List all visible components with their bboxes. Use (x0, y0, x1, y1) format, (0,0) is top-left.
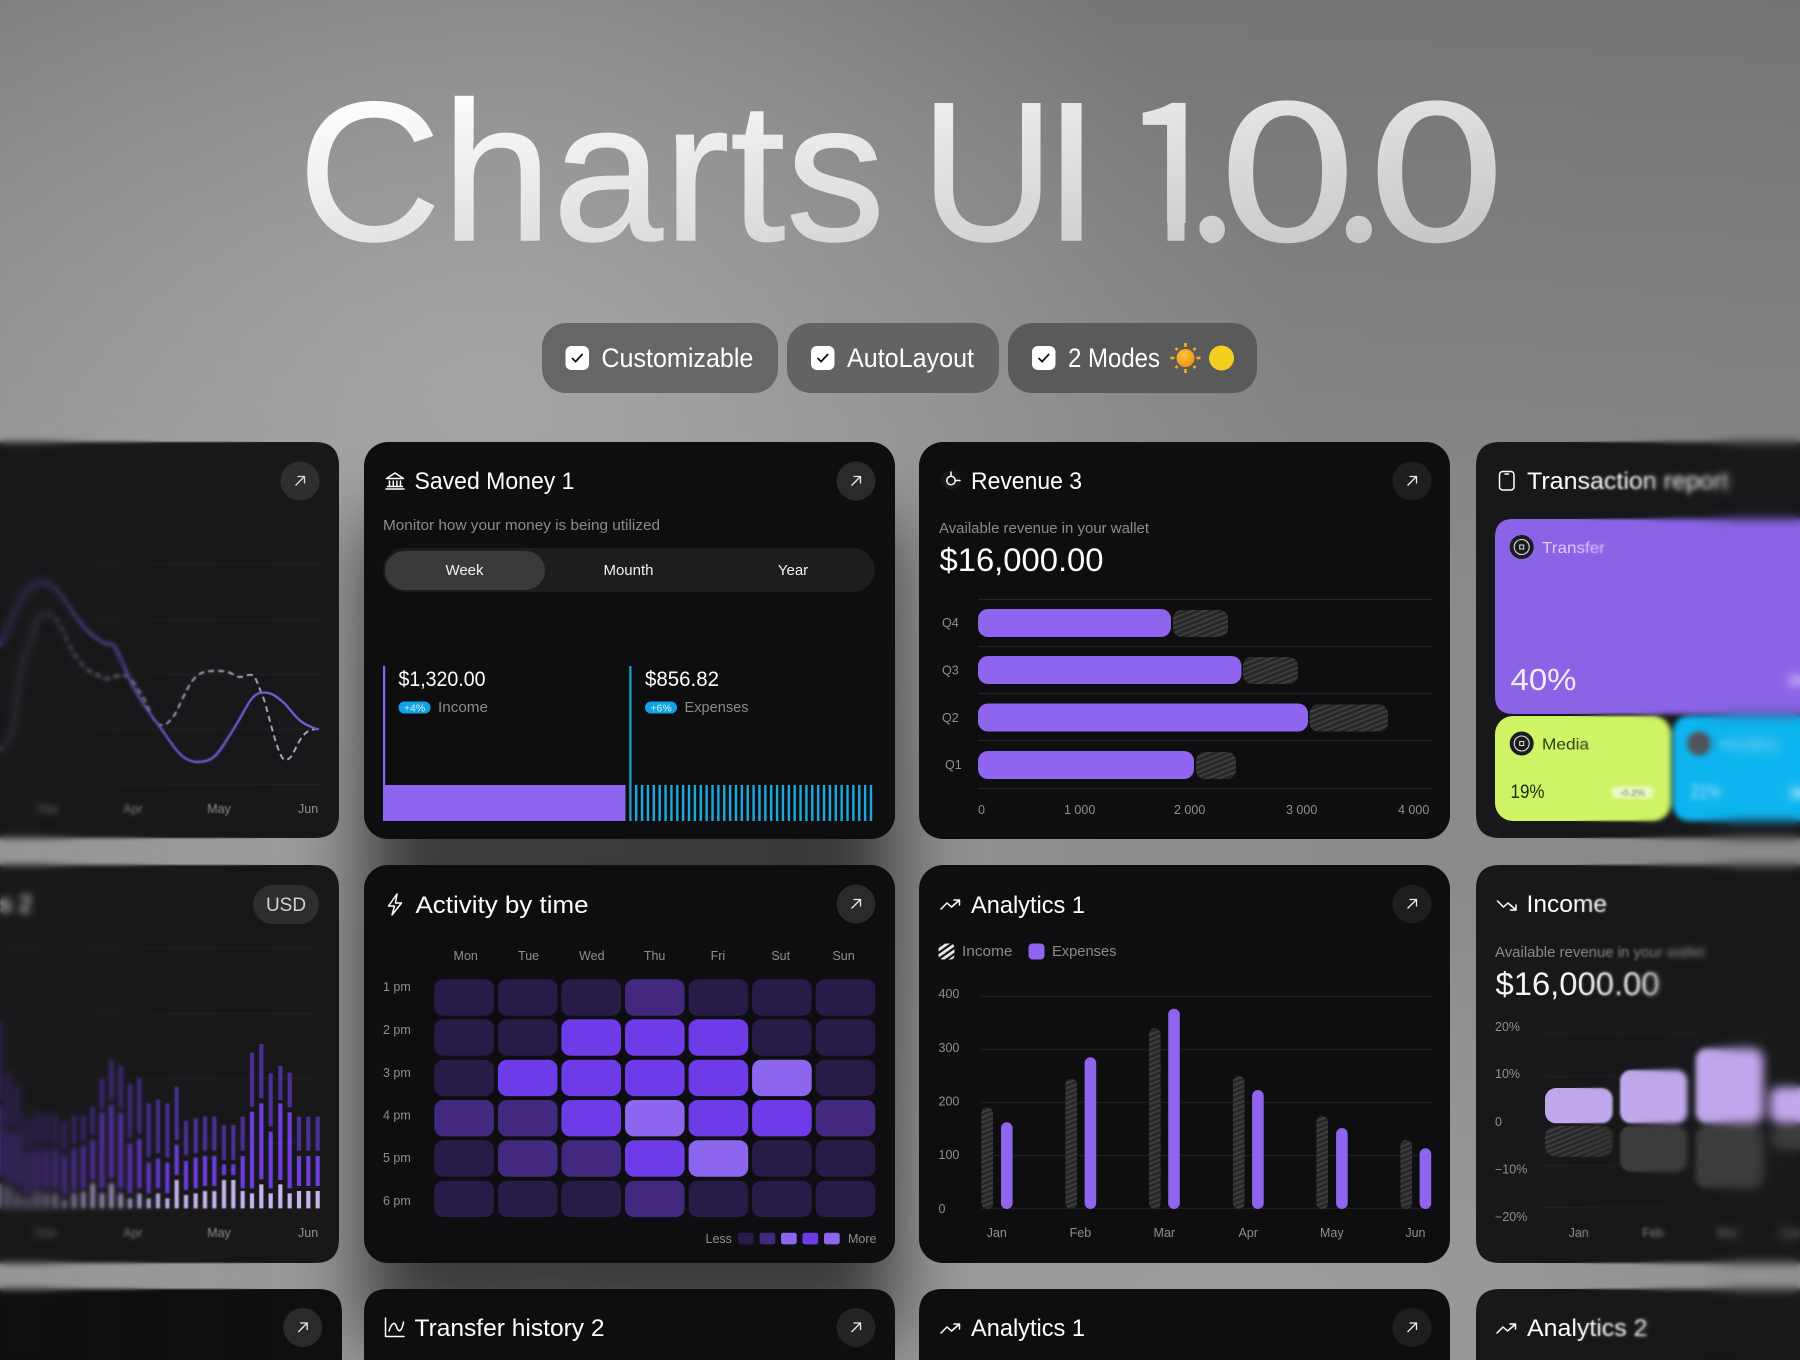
panel: Revenue 3 (919, 442, 1450, 839)
hour labels: 6 pm (383, 1194, 411, 1208)
panel: Analytics 2 (1476, 1289, 1800, 1360)
tile: Healthy (1673, 716, 1800, 821)
tile: Media: Media (1542, 736, 1589, 754)
badge: 2 Modes: 2 Modes (1068, 343, 1160, 373)
horizontal bar chart: 3 000 (1286, 803, 1317, 817)
tile: Transfer: Transfer (1542, 540, 1606, 557)
income column (383, 666, 626, 821)
stacked bar chart (0, 1020, 318, 1208)
button: open arrow (836, 1308, 876, 1347)
tile: Healthy: Healthy (1720, 736, 1778, 754)
badge: AutoLayout: AutoLayout (847, 343, 974, 373)
expenses column: $856.82 (645, 668, 719, 691)
panel: bottom-left card (0, 1289, 342, 1360)
heading: Transfer history 2 (414, 1315, 604, 1342)
icon: trend up (941, 900, 960, 909)
icon: trend up (1497, 1324, 1516, 1333)
value: $16,000.00 (940, 542, 1104, 578)
expenses column: Expenses (684, 699, 748, 716)
month labels: Apr (123, 1226, 143, 1240)
horizontal bar chart: Q1 (945, 758, 962, 772)
line: dashed series (0, 613, 319, 760)
horizontal bar chart: 1 000 (1064, 803, 1095, 817)
heading: Revenue 3 (971, 468, 1082, 495)
button: currency (253, 885, 319, 924)
diverging bar chart: Mar (1717, 1226, 1739, 1240)
title (307, 96, 1496, 244)
grouped bar chart: 300 (938, 1041, 959, 1055)
subtitle: Available revenue in your wallet (939, 520, 1150, 537)
grouped bar chart: Apr (1238, 1226, 1258, 1240)
badge: Customizable: Customizable (601, 343, 753, 373)
value: $16,000.00 (1496, 966, 1660, 1002)
icon: moon (1209, 346, 1234, 370)
panel: Analytics 1 (919, 865, 1450, 1263)
heading: Transaction report (1527, 468, 1729, 495)
horizontal bar chart: 2 000 (1174, 803, 1205, 817)
button: open arrow (836, 462, 876, 500)
horizontal bar chart (942, 600, 1432, 817)
tile: Transfer (1495, 519, 1800, 714)
title: 1 (1121, 24, 1224, 294)
horizontal bar chart: 0 (978, 803, 985, 817)
icon: trend up (941, 1324, 960, 1333)
heatmap legend: Less (706, 1232, 732, 1246)
expenses column: +6% (650, 702, 672, 714)
grouped bar chart: 0 (938, 1202, 946, 1216)
horizontal bar chart: 4 000 (1398, 803, 1429, 817)
month labels: May (207, 1226, 232, 1240)
badge: Customizable (542, 323, 778, 393)
button: open arrow (1392, 1308, 1432, 1347)
icon: phone (1500, 472, 1514, 490)
diverging bar chart: 10% (1495, 1067, 1520, 1081)
day labels: Tue (518, 949, 539, 963)
grouped bar chart: 200 (938, 1094, 959, 1108)
hour labels: 2 pm (383, 1023, 411, 1037)
heatmap legend: More (848, 1232, 877, 1246)
tile: Media: -0.2% (1620, 788, 1645, 799)
heatmap (434, 979, 875, 1217)
icon: bolt (388, 894, 402, 915)
panel: Transfer history 2 (364, 1289, 895, 1360)
heading: Activity by time (416, 892, 588, 919)
grouped bar chart: Mar (1154, 1226, 1175, 1240)
title: . (1333, 24, 1385, 294)
title: 0 (1366, 24, 1507, 294)
tile: Media: 19% (1510, 782, 1545, 803)
grouped bar chart: Feb (1070, 1226, 1091, 1240)
button: currency: USD (266, 895, 306, 916)
month labels: Mar (35, 1226, 57, 1240)
day labels: Fri (711, 949, 725, 963)
title: U (921, 61, 1054, 282)
diverging bar chart: −10% (1495, 1162, 1527, 1176)
heading: Saved Money 1 (414, 468, 574, 495)
segmented control (383, 548, 875, 592)
tile: Transfer: 40% (1510, 662, 1576, 697)
grouped bar chart: Jun (1405, 1226, 1426, 1240)
diverging bar chart: Jan (1569, 1226, 1589, 1240)
title: 0 (1217, 24, 1358, 294)
diverging bar chart: 0 (1495, 1115, 1502, 1129)
button: open arrow (280, 462, 320, 500)
heading: Analytics 2 (1527, 1315, 1648, 1342)
heading: Analytics 1 (971, 1315, 1085, 1342)
icon: revenue (942, 470, 960, 490)
subtitle: Available revenue in your wallet (1495, 944, 1706, 961)
badge: AutoLayout (787, 323, 999, 393)
button: open arrow (1392, 462, 1432, 500)
month labels (35, 1226, 318, 1240)
title: Charts (298, 61, 885, 282)
panel: line chart (left, row 1) (0, 442, 339, 838)
hour labels: 4 pm (383, 1108, 411, 1122)
heatmap legend (706, 1232, 877, 1246)
horizontal bar chart: Q2 (942, 711, 959, 725)
day labels: Sut (771, 949, 791, 963)
panel: stacked bars (left, row 2) (0, 865, 339, 1263)
chart legend: Expenses (1052, 943, 1116, 960)
hour labels: 3 pm (383, 1066, 411, 1080)
chart legend (938, 943, 1116, 960)
button: open arrow (836, 884, 876, 924)
income column: +4% (404, 702, 425, 714)
button: open arrow (283, 1308, 322, 1347)
panel: Saved Money 1 (364, 442, 895, 839)
income column: $1,320.00 (398, 668, 486, 691)
hour labels: 5 pm (383, 1151, 411, 1165)
segmented control: Mounth (603, 562, 654, 579)
income column: Income (438, 699, 488, 716)
icon: bank (386, 473, 404, 489)
day labels: Sun (832, 949, 855, 963)
heading: Analytics 1 (971, 892, 1085, 919)
day labels: Wed (579, 949, 605, 963)
day labels: Thu (644, 949, 665, 963)
heading: Income (1526, 891, 1607, 918)
hour labels: 1 pm (383, 980, 411, 994)
grouped bar chart: 400 (938, 987, 959, 1001)
subtitle: Monitor how your money is being utilized (383, 517, 660, 534)
grouped bar chart: May (1320, 1226, 1344, 1240)
hour labels (383, 980, 411, 1208)
title: I (1044, 61, 1099, 282)
month labels: Jun (298, 802, 318, 816)
segmented control: Week (445, 562, 484, 579)
panel: Activity by time (364, 865, 895, 1263)
diverging bar chart (1495, 1020, 1800, 1240)
button: open arrow (1392, 884, 1432, 924)
day labels (454, 949, 855, 963)
segmented control: Year (778, 562, 808, 579)
grouped bar chart (938, 987, 1432, 1240)
tile: Healthy: 21% (1690, 782, 1721, 803)
chart legend: Income (962, 943, 1012, 960)
month labels: Jun (298, 1226, 318, 1240)
day labels: Mon (454, 949, 478, 963)
panel: Income (1476, 865, 1800, 1263)
line: purple series (0, 582, 319, 762)
month labels (37, 802, 318, 816)
grouped bar chart: Jan (987, 1226, 1007, 1240)
feature badges (542, 323, 1257, 393)
month labels: Apr (123, 802, 143, 816)
panel: Analytics 1 (row 3) (919, 1289, 1450, 1360)
icon: sun (1170, 343, 1200, 373)
icon: trend down (1498, 901, 1516, 910)
month labels: May (207, 802, 232, 816)
diverging bar chart: Apr (1780, 1226, 1800, 1240)
heading fragment: s 2 (0, 891, 32, 918)
month labels: Mar (37, 802, 59, 816)
expenses column (629, 666, 872, 821)
panel: Transaction report (1476, 442, 1800, 838)
horizontal bar chart: Q3 (942, 664, 959, 678)
diverging bar chart: −20% (1495, 1210, 1527, 1224)
horizontal bar chart: Q4 (942, 616, 959, 630)
tile: Media (1495, 716, 1671, 821)
icon: line chart (386, 1318, 404, 1336)
diverging bar chart: Feb (1642, 1226, 1664, 1240)
diverging bar chart: 20% (1495, 1020, 1520, 1034)
title: . (1186, 24, 1238, 294)
badge: 2 Modes (1008, 323, 1257, 393)
grouped bar chart: 100 (938, 1148, 959, 1162)
